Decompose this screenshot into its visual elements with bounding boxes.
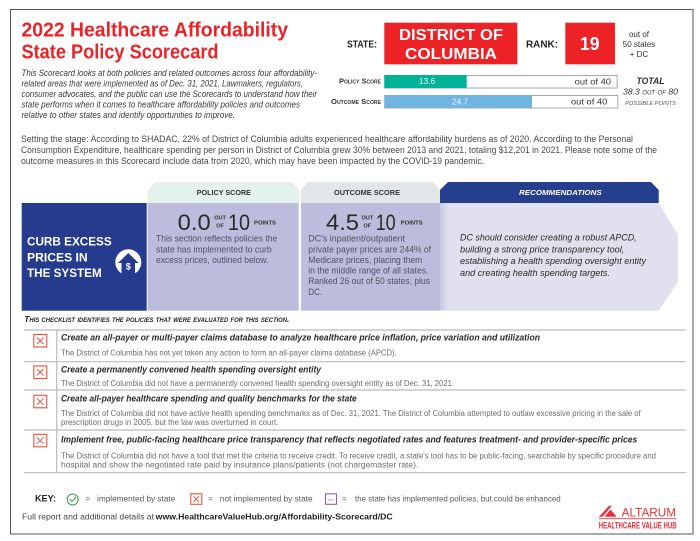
- title: 2022 Healthcare Affordability: [22, 19, 289, 42]
- checklist item 3: [34, 393, 642, 427]
- key: =: [342, 494, 347, 504]
- panel: outcome score: OUT: [361, 216, 374, 222]
- icon: red x box: [34, 395, 47, 408]
- tab: policy score: [148, 182, 300, 203]
- title: [22, 19, 289, 64]
- panel: outcome score: DC.: [308, 287, 322, 297]
- panel: outcome score: OF: [363, 224, 372, 230]
- intro text: state performs when it comes to healthcare affordability policies and outcomes: [22, 100, 300, 110]
- intro text: related areas that were implemented as of Dec. 31, 2021. Lawmakers, regulators,: [22, 78, 303, 90]
- logo: altarum: [599, 506, 677, 530]
- icon: red x box: [34, 334, 47, 347]
- logo: altarum: ALTARUM: [622, 507, 676, 519]
- panel: outcome score: in the middle range of all states.: [308, 266, 428, 276]
- title: State Policy Scorecard: [22, 41, 218, 64]
- rank note: out of: [629, 30, 650, 39]
- total score: 38.3 out of 80: [623, 86, 678, 96]
- checklist item 4: Implement free, public-facing healthcare price transparency that reflects negotiated rates and features treatment- and provider-specific prices: [61, 434, 637, 445]
- intro text: relative to other states and identify opportunities to improve.: [22, 110, 235, 121]
- policy score bar: out of 40: [575, 76, 611, 86]
- icon: green check: [67, 494, 78, 505]
- tab: outcome score: [301, 182, 440, 203]
- panel: outcome score: private payer prices are 244% of: [308, 244, 431, 254]
- outcome score bar: 24.7: [452, 96, 469, 106]
- intro text: consumer advocates, and the public can use the Scorecards to understand how their: [22, 89, 318, 100]
- panel: outcome score: 10: [376, 210, 396, 235]
- key: the state has implemented policies, but could be enhanced: [355, 494, 561, 503]
- checklist item 1: The District of Columbia has not yet taken any action to form an all-payer claims database (APCD).: [61, 349, 397, 358]
- icon: purple dots: [326, 494, 336, 504]
- panel: policy score: 0.0: [178, 210, 211, 235]
- panel: recommendations: DC should consider creating a robust APCD,: [460, 233, 637, 244]
- icon: house with dollar sign: $: [126, 262, 131, 272]
- rank note: [623, 30, 655, 59]
- checklist item 2: [34, 364, 454, 388]
- section heading block: PRICES IN: [27, 250, 88, 264]
- key: =: [208, 494, 213, 504]
- checklist item 1: [34, 332, 540, 358]
- panel: outcome score: [301, 203, 440, 311]
- intro text: This Scorecard looks at both policies and related outcomes across four affordability-: [22, 68, 317, 79]
- setting the stage text: [21, 134, 657, 167]
- rank note: 50 states: [623, 40, 655, 49]
- panel: outcome score: Medicare prices, placing them: [308, 255, 423, 265]
- panel: policy score: POINTS: [254, 220, 276, 226]
- key: not implemented by state: [220, 494, 313, 503]
- total score: TOTAL: [636, 76, 664, 86]
- tab: outcome score: OUTCOME SCORE: [334, 188, 400, 197]
- panel: policy score: OF: [216, 224, 224, 230]
- checklist item 4: hospital and show the negotiated rate paid by insurance plans/patients (not chargemaster rate).: [61, 461, 418, 470]
- footer link: Full report and additional details at: [22, 511, 155, 521]
- outcome score bar: [331, 95, 618, 108]
- policy score bar: Policy Score: [339, 76, 382, 86]
- section heading block: CURB EXCESS: [27, 235, 112, 249]
- section heading block: THE SYSTEM: [27, 266, 102, 280]
- checklist item 4: [34, 434, 656, 470]
- checklist item 3: Create all-payer healthcare spending and quality benchmarks for the state: [61, 393, 357, 404]
- setting the stage text: Setting the stage: According to SHADAC, 22% of District of Columbia adults experienced healthcare affordability burdens as of 2020. According to the Personal: [21, 134, 633, 145]
- checklist item 4: The District of Columbia did not have a tool that met the criteria to receive credit. To receive credit, a state's tool has to be public-facing, searchable by specific procedure and: [61, 451, 656, 460]
- icon: red x box: [34, 434, 47, 447]
- panel: recommendations: building a strong price transparency tool,: [460, 244, 624, 255]
- tab: recommendations: [440, 182, 659, 203]
- footer link: [22, 511, 393, 521]
- checklist intro: This checklist identifies the policies that were evaluated for this section.: [24, 314, 289, 324]
- setting the stage text: outcome measures in this Scorecard include data from 2020, which may have been impacted by the COVID-19 pandemic.: [21, 156, 484, 167]
- panel: recommendations: [440, 203, 678, 311]
- rank box: 19: [580, 33, 600, 54]
- state name box: DISTRICT OF: [399, 27, 503, 44]
- panel: policy score: This section reflects policies the: [156, 234, 277, 244]
- panel: outcome score: 4.5: [326, 210, 359, 235]
- total score: [623, 76, 678, 107]
- policy score bar: [339, 75, 617, 88]
- intro text: [22, 68, 318, 121]
- tab: policy score: POLICY SCORE: [197, 188, 251, 197]
- rank box: [565, 23, 615, 64]
- panel: policy score: excess prices, outlined below.: [156, 255, 268, 265]
- key: =: [86, 494, 90, 504]
- tab: recommendations: RECOMMENDATIONS: [519, 188, 602, 197]
- key: implemented by state: [97, 494, 176, 503]
- state label: STATE:: [347, 40, 377, 50]
- section heading block: [22, 203, 147, 311]
- panel: outcome score: Ranked 26 out of 50 states, plus: [308, 276, 430, 286]
- checklist item 2: Create a permanently convened health spending oversight entity: [61, 364, 322, 375]
- outcome score bar: Outcome Score: [331, 97, 382, 106]
- rank note: + DC: [630, 50, 648, 59]
- footer link: www.HealthcareValueHub.org/Affordability-Scorecard/DC: [155, 511, 393, 521]
- checklist item 3: The District of Columbia did not have active health spending benchmarks as of Dec. 31, 2021. The District of Columbia attempted to outlaw excessive pricing in the sale of: [61, 409, 642, 418]
- panel: policy score: [148, 203, 299, 311]
- checklist item 2: The District of Columbia did not have a permanently convened health spending oversight entity as of Dec. 31, 2021.: [61, 379, 454, 388]
- panel: policy score: state has implemented to curb: [156, 244, 272, 254]
- icon: purple dots: ...: [328, 496, 334, 502]
- panel: outcome score: POINTS: [401, 220, 423, 226]
- key: [35, 494, 561, 505]
- state name box: [384, 23, 517, 64]
- panel: outcome score: DC's inpatient/outpatient: [308, 234, 405, 244]
- panel: recommendations: establishing a health spending oversight entity: [460, 256, 647, 267]
- policy score bar: 13.6: [419, 76, 436, 86]
- checklist item 3: prescription drugs in 2005, but the law was overturned in court.: [61, 418, 278, 427]
- rank label: RANK:: [526, 40, 558, 50]
- icon: red x box: [34, 366, 47, 378]
- checklist item 1: Create an all-payer or multi-payer claims database to analyze healthcare price inflation, price variation and utilization: [61, 332, 540, 343]
- state name box: COLUMBIA: [405, 46, 497, 63]
- panel: recommendations: and creating health spending targets.: [460, 268, 610, 279]
- key: KEY:: [35, 494, 56, 505]
- outcome score bar: out of 40: [571, 96, 608, 106]
- panel: policy score: 10: [228, 210, 250, 235]
- checklist rules: [24, 330, 686, 473]
- panel: policy score: OUT: [214, 216, 226, 222]
- total score: POSSIBLE POINTS: [625, 101, 676, 107]
- icon: red x: [191, 494, 202, 504]
